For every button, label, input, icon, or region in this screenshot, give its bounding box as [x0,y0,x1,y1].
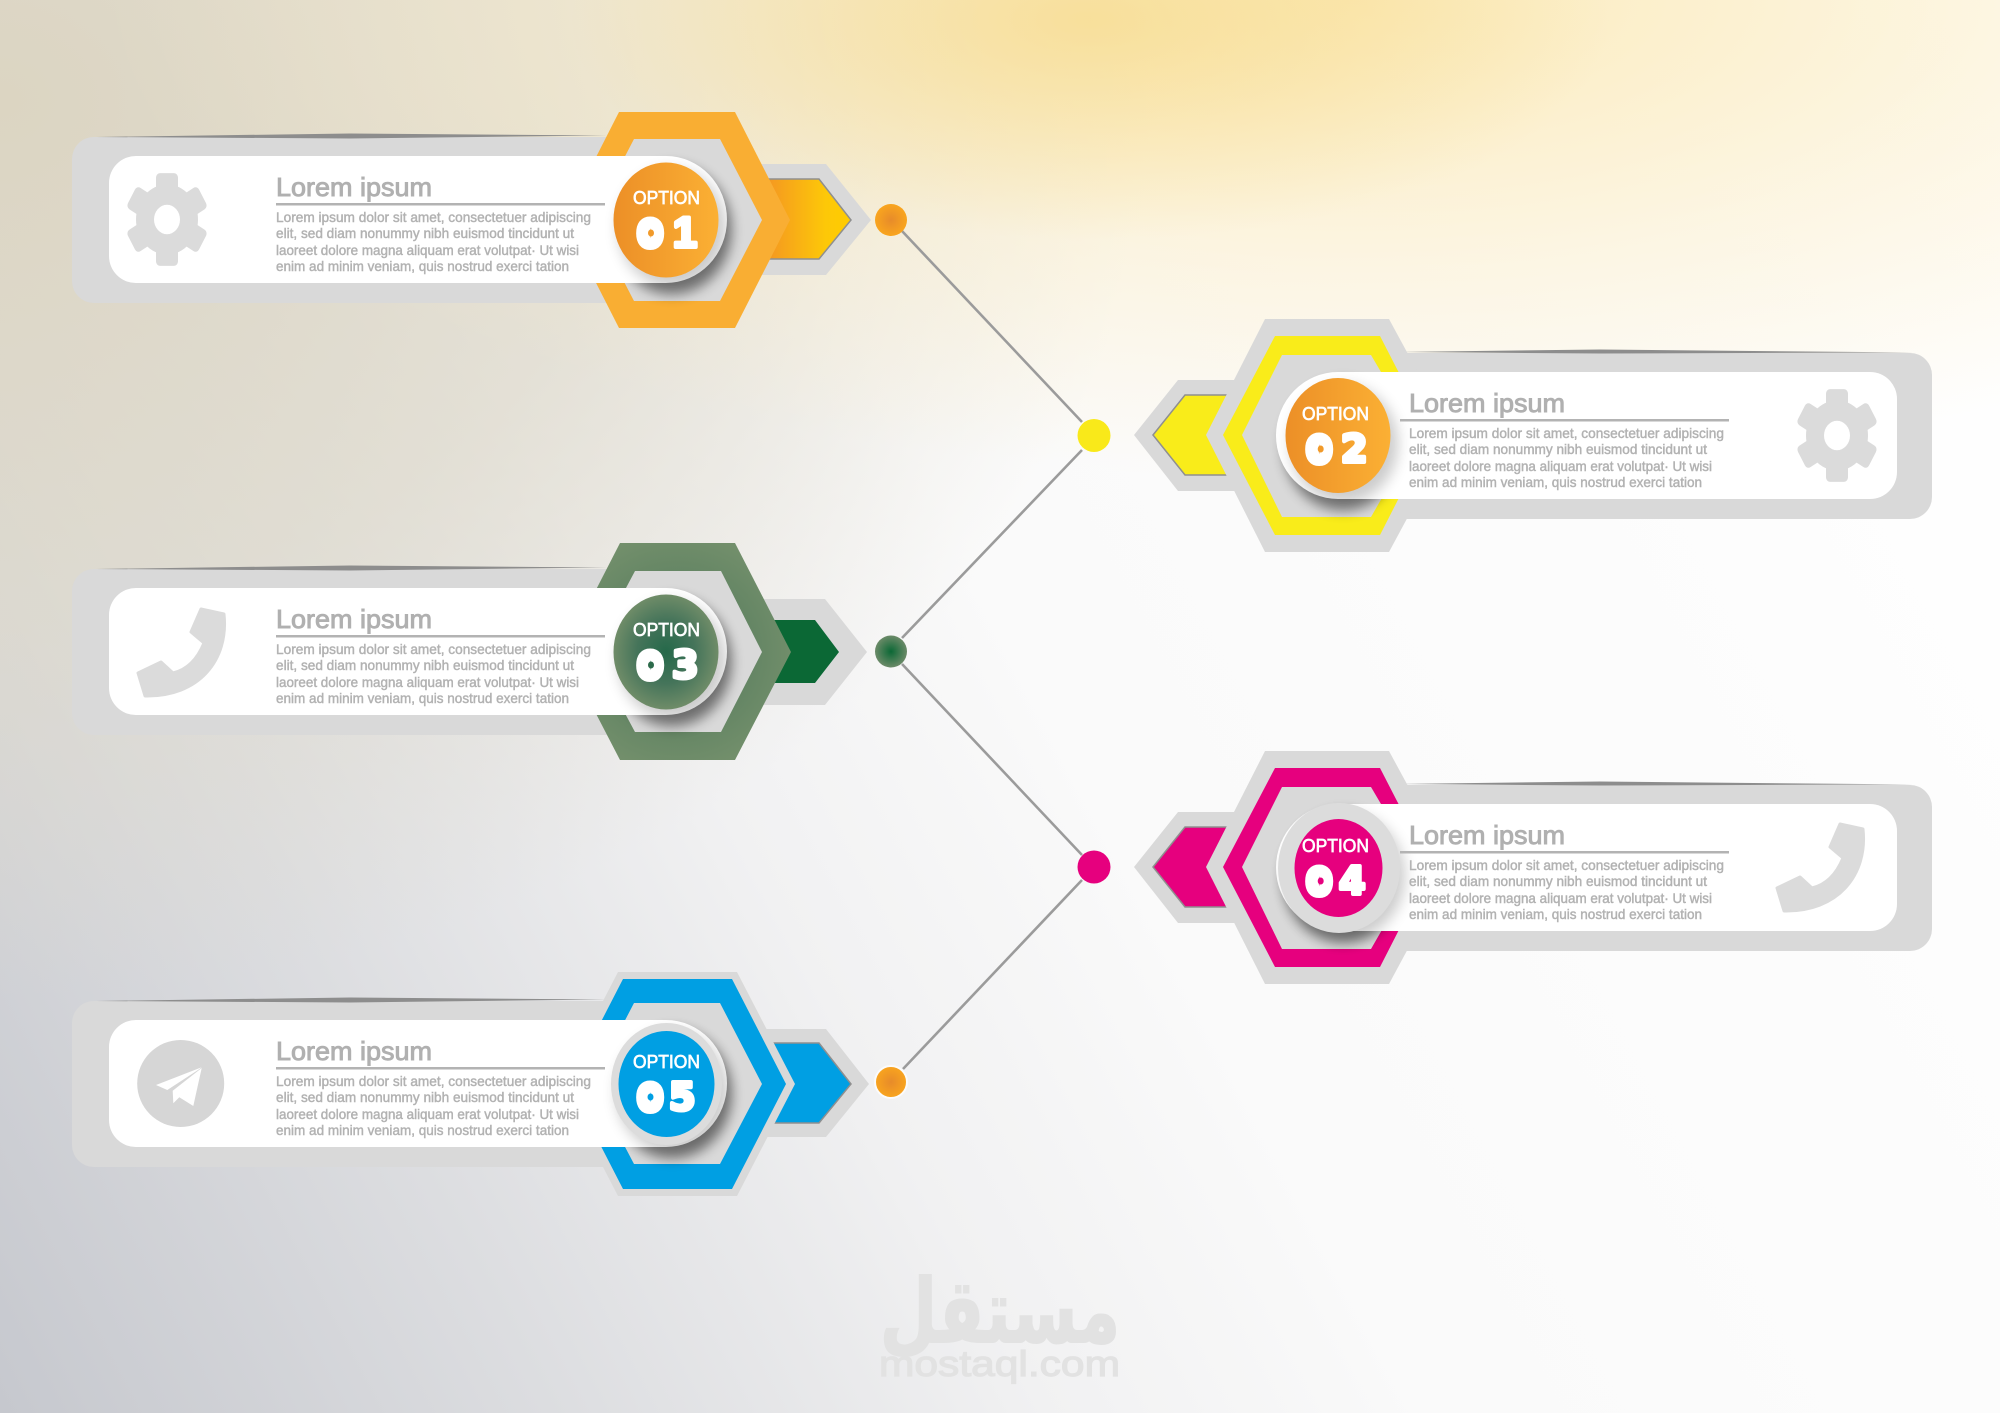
hexagon outer [1206,751,1452,984]
body text [276,641,591,706]
hexagon frame [1223,336,1431,535]
body text: Lorem ipsum dolor sit amet, consectetuer adipiscing [276,1073,591,1089]
hexagon frame [564,543,791,760]
badge [1294,819,1382,917]
connector lines [902,231,1082,1069]
icon: gear [126,173,208,266]
body text [276,1073,591,1138]
heading: Lorem ipsum [1409,388,1565,418]
panel backing [72,569,632,735]
badge number: 0 [638,215,662,255]
badge label: OPTION [633,619,700,640]
body text [1409,425,1724,490]
top edge shadow [1396,350,1913,354]
bubble shadow [612,1029,732,1159]
arrow [1153,395,1240,475]
arrow [750,620,839,683]
badge shadow [1290,385,1398,503]
zero counter [648,230,654,236]
body text: enim ad minim veniam, quis nostrud exerci tation [1409,906,1702,922]
body text: laoreet dolore magna aliquam erat volutpat· Ut wisi [276,674,579,690]
badge number: 0 [638,1079,662,1119]
icon: paper plane in circle [137,1040,224,1127]
badge number: 5 [669,1075,695,1119]
bubble shadow [612,597,732,727]
body text: enim ad minim veniam, quis nostrud exerci tation [276,258,569,274]
node dot: option 5 [875,1066,907,1098]
panel backing [72,137,632,303]
arrow [750,179,851,259]
node dot: option 3 [875,636,907,668]
body text: Lorem ipsum dolor sit amet, consectetuer adipiscing [1409,857,1724,873]
heading rule [1400,851,1729,854]
badge [1286,378,1390,493]
hexagon outer [1206,319,1452,552]
panel: option 02 [1134,319,1932,552]
node dot: pink junction [1078,850,1110,884]
heading: Lorem ipsum [1409,820,1565,850]
white card [109,156,727,283]
panel: option 03 [72,543,867,760]
zero counter [1318,446,1324,452]
body text: elit, sed diam nonummy nibh euismod tincidunt ut [1409,873,1707,889]
hexagon frame [564,112,790,328]
white card [1276,804,1897,931]
top edge shadow [96,134,607,138]
heading rule [276,203,605,206]
icon: phone [138,609,225,696]
hexagon inner [592,139,762,301]
watermark: mostaql logo [879,1260,1120,1384]
body text: enim ad minim veniam, quis nostrud exerci tation [1409,474,1702,490]
arrow backing [740,599,867,705]
node dot: option 1 [875,204,907,236]
badge label: OPTION [1302,403,1369,424]
panel backing [72,1001,632,1167]
white card [109,1020,727,1147]
body text: elit, sed diam nonummy nibh euismod tincidunt ut [276,1089,574,1105]
icon: phone [1777,824,1864,911]
body text [276,209,591,274]
body text: Lorem ipsum dolor sit amet, consectetuer adipiscing [276,209,591,225]
arrow backing [1134,812,1240,923]
badge number: 0 [1307,863,1331,903]
badge shadow [618,601,726,719]
panel: option 04 [1134,751,1932,984]
arrow [750,1043,851,1123]
badge shadow [618,169,726,287]
hexagon inner [1242,787,1418,949]
zero counter [1318,878,1324,884]
bubble shadow [1283,381,1403,511]
arrow backing [740,164,871,275]
heading rule [276,635,605,638]
hexagon inner [1242,355,1418,517]
badge number: 3 [672,643,698,687]
watermark: mostaql logo: mostaql.com [879,1343,1120,1384]
badge number: 0 [638,647,662,687]
bubble shadow [612,165,732,295]
node dot: yellow junction [1078,419,1110,452]
body text: elit, sed diam nonummy nibh euismod tincidunt ut [276,657,574,673]
hexagon frame [569,979,786,1189]
badge [614,594,718,710]
badge label: OPTION [633,1051,700,1072]
badge ring [1278,803,1400,933]
arrow backing [740,1029,869,1137]
body text: laoreet dolore magna aliquam erat volutpat· Ut wisi [276,242,579,258]
heading: Lorem ipsum [276,1036,432,1066]
heading: Lorem ipsum [276,604,432,634]
panel backing [1380,353,1932,519]
zero counter [648,662,654,668]
top edge shadow [1396,782,1913,786]
watermark: mostaql logo: مستقل [880,1260,1120,1363]
hexagon inner [592,1003,762,1164]
body text: enim ad minim veniam, quis nostrud exerci tation [276,1122,569,1138]
bubble shadow [1283,813,1403,943]
body text: Lorem ipsum dolor sit amet, consectetuer adipiscing [1409,425,1724,441]
badge number: 0 [1307,431,1331,471]
badge shadow [1285,812,1405,940]
white card [109,588,727,715]
badge number: 1 [673,209,697,257]
zero counter [648,1094,654,1100]
panel: option 01 [72,112,871,328]
hexagon frame [1223,768,1431,967]
hexagon outer [560,972,795,1196]
body text: elit, sed diam nonummy nibh euismod tincidunt ut [276,225,574,241]
white card [1276,372,1897,499]
heading rule [276,1067,605,1070]
badge label: OPTION [1302,835,1369,856]
body text: enim ad minim veniam, quis nostrud exerci tation [276,690,569,706]
arrow backing [1134,380,1240,491]
badge [614,162,718,278]
badge label: OPTION [633,187,700,208]
body text [1409,857,1724,922]
body text: laoreet dolore magna aliquam erat volutpat· Ut wisi [1409,458,1712,474]
body text: Lorem ipsum dolor sit amet, consectetuer adipiscing [276,641,591,657]
panel backing [1380,785,1932,951]
panel: option 05 [72,972,869,1196]
top edge shadow [96,998,607,1002]
hexagon inner [592,571,762,732]
heading: Lorem ipsum [276,172,432,202]
top edge shadow [96,566,607,570]
body text: laoreet dolore magna aliquam erat volutpat· Ut wisi [276,1106,579,1122]
badge [618,1031,714,1137]
body text: laoreet dolore magna aliquam erat volutpat· Ut wisi [1409,890,1712,906]
body text: elit, sed diam nonummy nibh euismod tincidunt ut [1409,441,1707,457]
heading rule [1400,419,1729,422]
arrow [1153,827,1240,907]
badge shadow [616,1031,728,1153]
badge number: 2 [1341,427,1367,471]
icon: gear [1796,389,1878,482]
badge number: 4 [1339,859,1365,903]
badge ring [611,1023,722,1145]
